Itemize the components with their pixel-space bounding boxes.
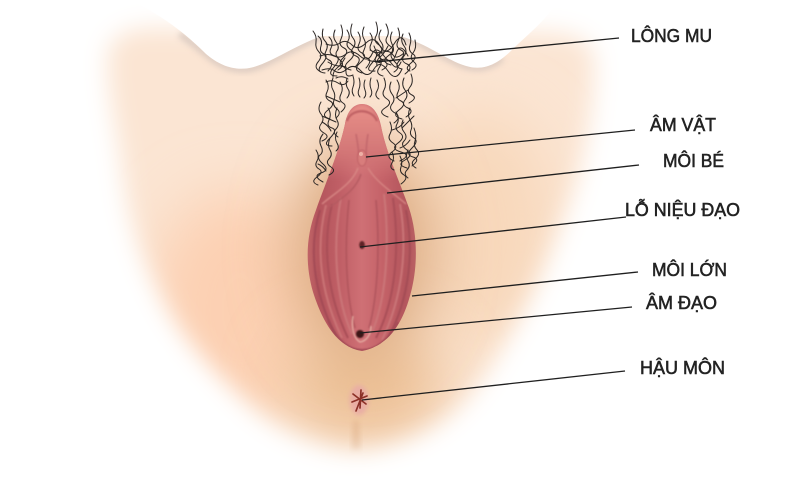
V folds below clitoris <box>322 168 358 204</box>
label: lỗ niệu đạo: LỖ NIỆU ĐẠO <box>625 199 740 220</box>
lower vestibule highlight <box>352 316 371 342</box>
leader: hậu môn <box>362 371 625 400</box>
pubic hair <box>313 22 419 185</box>
icon: clitoris <box>358 150 366 166</box>
centre line highlight <box>361 252 363 312</box>
leader: âm vật <box>366 130 635 157</box>
labia <box>308 104 416 351</box>
lower rim <box>328 320 398 350</box>
leader: âm đạo <box>360 307 632 333</box>
left peach tone <box>150 190 330 430</box>
hood rim <box>347 111 377 121</box>
labial fold shading <box>314 134 410 340</box>
body skin background <box>98 18 604 463</box>
label: hậu môn: HẬU MÔN <box>640 357 725 378</box>
lower tan tone <box>285 325 445 445</box>
leader lines <box>360 38 639 400</box>
icon: anus <box>350 385 368 415</box>
label: môi bé: MÔI BÉ <box>663 150 724 171</box>
central cleft shadow <box>351 420 361 450</box>
label: môi lớn: MÔI LỚN <box>652 259 727 280</box>
label: âm đạo: ÂM ĐẠO <box>646 293 717 313</box>
right peach tone <box>405 110 555 350</box>
label: âm vật: ÂM VẬT <box>650 115 716 135</box>
label: lông mu: LÔNG MU <box>631 25 712 46</box>
tan shadow around labia <box>292 140 432 360</box>
leader: lỗ niệu đạo <box>360 217 626 247</box>
leader: môi lớn <box>412 272 638 296</box>
icon: vaginal opening <box>356 330 364 338</box>
icon: urethral opening <box>359 241 365 249</box>
upper hood tone <box>331 104 394 171</box>
leader: môi bé <box>387 165 639 193</box>
leader: lông mu <box>375 38 619 62</box>
top edge shadow <box>180 34 502 69</box>
